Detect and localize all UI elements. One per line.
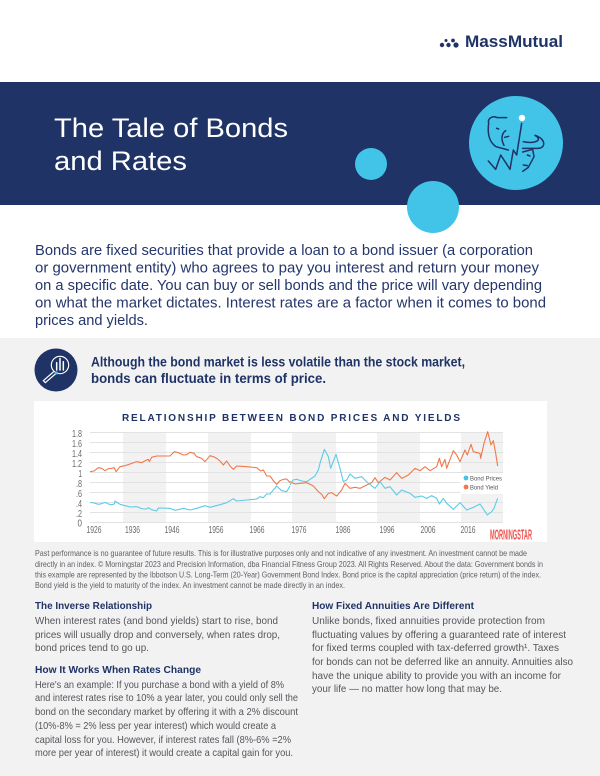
- section: How It Works When Rates Change: How It Works When Rates Change: [35, 664, 201, 676]
- x axis labels: 2016: [460, 524, 476, 536]
- section: The Inverse Relationship: bond prices tend to go up.: [35, 643, 149, 654]
- section: How Fixed Annuities Are Different: for bonds can not be deferred like an annuity. Annuities also: [312, 657, 573, 668]
- section: The Inverse Relationship: prices will usually drop and conversely, when rates drop,: [35, 630, 280, 641]
- x axis labels: [86, 524, 476, 536]
- panel: chart: MORNINGSTAR: [490, 526, 532, 544]
- x axis labels: 2006: [420, 524, 436, 536]
- section: How Fixed Annuities Are Different: fluctuating values by offering a guaranteed rate of interest: [312, 630, 566, 641]
- x axis labels: 1996: [380, 524, 395, 536]
- x axis labels: 1966: [250, 524, 265, 536]
- section: How Fixed Annuities Are Different: have the unique ability to provide you with an income for: [312, 671, 562, 682]
- x axis labels: 1976: [292, 524, 307, 536]
- section: The Inverse Relationship: When interest rates (and bond yields) start to rise, bond: [35, 616, 278, 627]
- icon: bear and bull with market line: [469, 96, 563, 190]
- x axis labels: 1936: [125, 524, 140, 536]
- shaded decades: [123, 432, 503, 522]
- line: bond price: [90, 449, 498, 515]
- y axis labels: 1.6: [72, 438, 82, 450]
- intro paragraph: [35, 243, 546, 329]
- icon: magnifying glass over chart: [34, 348, 78, 392]
- y axis labels: 1.4: [72, 448, 82, 460]
- chart title: RELATIONSHIP BETWEEN BOND PRICES AND YIELDS: [122, 413, 460, 424]
- y axis labels: 1.8: [72, 428, 82, 440]
- section: The Inverse Relationship: [35, 600, 280, 654]
- section: How Fixed Annuities Are Different: your life — no matter how long that may be.: [312, 684, 502, 695]
- subheading callout: [91, 354, 465, 386]
- lower panel background: [0, 338, 600, 776]
- x axis labels: 1946: [164, 524, 180, 536]
- x axis labels: 1956: [208, 524, 224, 536]
- section: How It Works When Rates Change: bond on the secondary market by offering it with a 2% discount: [35, 707, 298, 718]
- y axis labels: .4: [76, 498, 82, 510]
- x axis labels: 1986: [336, 524, 351, 536]
- title: The Tale of Bonds: [54, 113, 288, 143]
- legend: [460, 473, 504, 494]
- disclaimer footnote: [35, 548, 543, 590]
- header banner: [0, 82, 600, 205]
- y axis labels: .6: [76, 488, 82, 500]
- section: How It Works When Rates Change: more per year of interest) it would create a capital gain for you.: [35, 748, 293, 759]
- section: How It Works When Rates Change: [35, 664, 298, 759]
- intro paragraph: on a specific date. You can buy or sell bonds and the price will vary depending: [35, 278, 542, 294]
- section: How It Works When Rates Change: (10%-8% = 2% less per year interest) which would create a: [35, 721, 276, 732]
- section: How Fixed Annuities Are Different: for fixed terms coupled with tax-deferred growth¹. Taxes: [312, 643, 559, 654]
- title: and Rates: [54, 146, 187, 176]
- decorative circle medium: [407, 181, 459, 233]
- intro paragraph: on what the market dictates. Interest rates are a factor when it comes to bond: [35, 296, 546, 312]
- subheading callout: Although the bond market is less volatile than the stock market,: [91, 354, 465, 370]
- title: [54, 113, 288, 176]
- x axis labels: 1926: [86, 524, 102, 536]
- subheading callout: bonds can fluctuate in terms of price.: [91, 371, 326, 386]
- section: How Fixed Annuities Are Different: [312, 600, 573, 695]
- decorative circle small: [355, 148, 387, 180]
- panel: chart: [34, 401, 547, 544]
- intro paragraph: or government entity) who agrees to pay you interest and return your money: [35, 260, 540, 276]
- y axis labels: 1: [78, 468, 82, 480]
- section: How It Works When Rates Change: capital loss for you. However, if interest rates fall (8%-6% =2%: [35, 735, 291, 746]
- y axis labels: 0: [78, 518, 82, 530]
- line: bond yield: [90, 432, 498, 499]
- y axis labels: .2: [76, 508, 82, 520]
- y axis labels: .8: [76, 478, 82, 490]
- section: How It Works When Rates Change: Here's an example: If you purchase a bond with a yield of 8%: [35, 680, 284, 691]
- logo: MassMutual: MassMutual: [465, 32, 563, 51]
- section: How Fixed Annuities Are Different: How Fixed Annuities Are Different: [312, 600, 474, 612]
- section: The Inverse Relationship: The Inverse Relationship: [35, 600, 152, 612]
- disclaimer footnote: Bond yield is the yield to maturity of the index. An investment cannot be made directly in an index.: [35, 580, 345, 590]
- intro paragraph: Bonds are fixed securities that provide a loan to a bond issuer (a corporation: [35, 243, 533, 259]
- y axis labels: 1.2: [72, 458, 82, 470]
- y axis labels: [72, 428, 82, 530]
- legend: Bond Yield: [470, 486, 498, 492]
- intro paragraph: prices and yields.: [35, 313, 148, 329]
- section: How It Works When Rates Change: and interest rates rise to 10% a year later, you could only sell the: [35, 693, 298, 704]
- legend: Bond Prices: [470, 476, 502, 482]
- section: How Fixed Annuities Are Different: Unlike bonds, fixed annuities provide protection from: [312, 616, 545, 627]
